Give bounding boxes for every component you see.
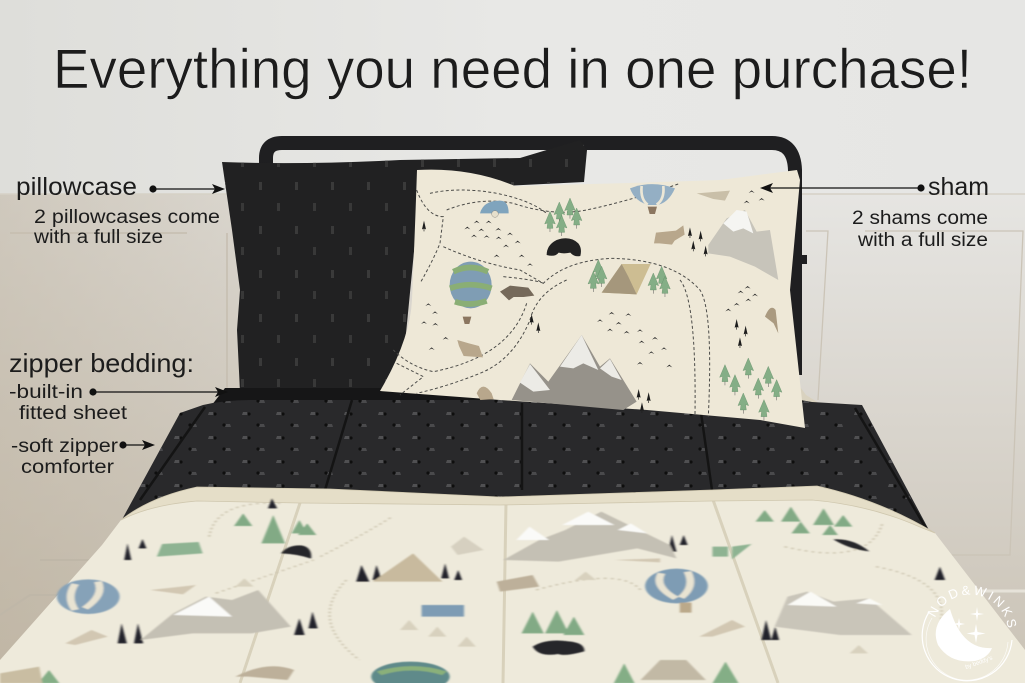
label: pillowcase: pillowcase: [16, 173, 137, 201]
label: pillowcase: 2 pillowcases come: [34, 207, 220, 228]
caribou, wolf, deer: [654, 225, 685, 245]
fitted sheet: [208, 362, 822, 412]
label: zipper bedding: -built-in: [9, 382, 83, 403]
black pillowcase: [222, 140, 587, 395]
label: zipper bedding: -soft zipper: [11, 436, 119, 457]
black zipper comforter: [100, 400, 937, 560]
title: Everything you need in one purchase!: [53, 37, 972, 100]
sham print: [393, 183, 782, 420]
centre mountains: [512, 335, 637, 410]
label: zipper bedding: comforter: [21, 457, 115, 478]
a-frame cabin: [602, 264, 651, 294]
arrow: sham: [760, 183, 925, 193]
label: zipper bedding: fitted sheet: [19, 403, 128, 424]
logo: Nod & Winks: by beddy's: [965, 655, 993, 671]
label: sham: 2 shams come: [852, 208, 988, 229]
camper: [480, 201, 509, 213]
arrow: pillowcase: [149, 184, 225, 194]
green trees: [545, 211, 555, 232]
black metal bed frame: [266, 143, 807, 375]
arrow: zipper comforter: [119, 440, 155, 450]
label: sham: sham: [928, 173, 989, 201]
cream comforter with map print: [0, 486, 1025, 683]
label: zipper bedding: zipper bedding:: [9, 348, 194, 378]
big balloon: [450, 262, 492, 308]
label: zipper bedding: [9, 348, 194, 478]
label: sham: with a full size: [857, 230, 988, 251]
small bird marks: [474, 221, 480, 223]
small balloon: [630, 184, 675, 205]
logo: Nod & Winks: NOD&WINKS: [928, 586, 1016, 628]
dashed trail lines: [393, 183, 710, 417]
bison: [547, 238, 581, 256]
logo: Nod & Winks: [922, 586, 1016, 682]
top-right mountain: [708, 210, 778, 280]
label: sham: [852, 173, 989, 251]
comforter print: [0, 498, 945, 683]
label: pillowcase: [16, 173, 220, 248]
label: pillowcase: with a full size: [33, 227, 163, 248]
cream map-print sham: [380, 170, 805, 428]
arrow: fitted sheet: [89, 387, 228, 397]
black pines: [530, 314, 534, 325]
comforter fold: [121, 486, 935, 533]
